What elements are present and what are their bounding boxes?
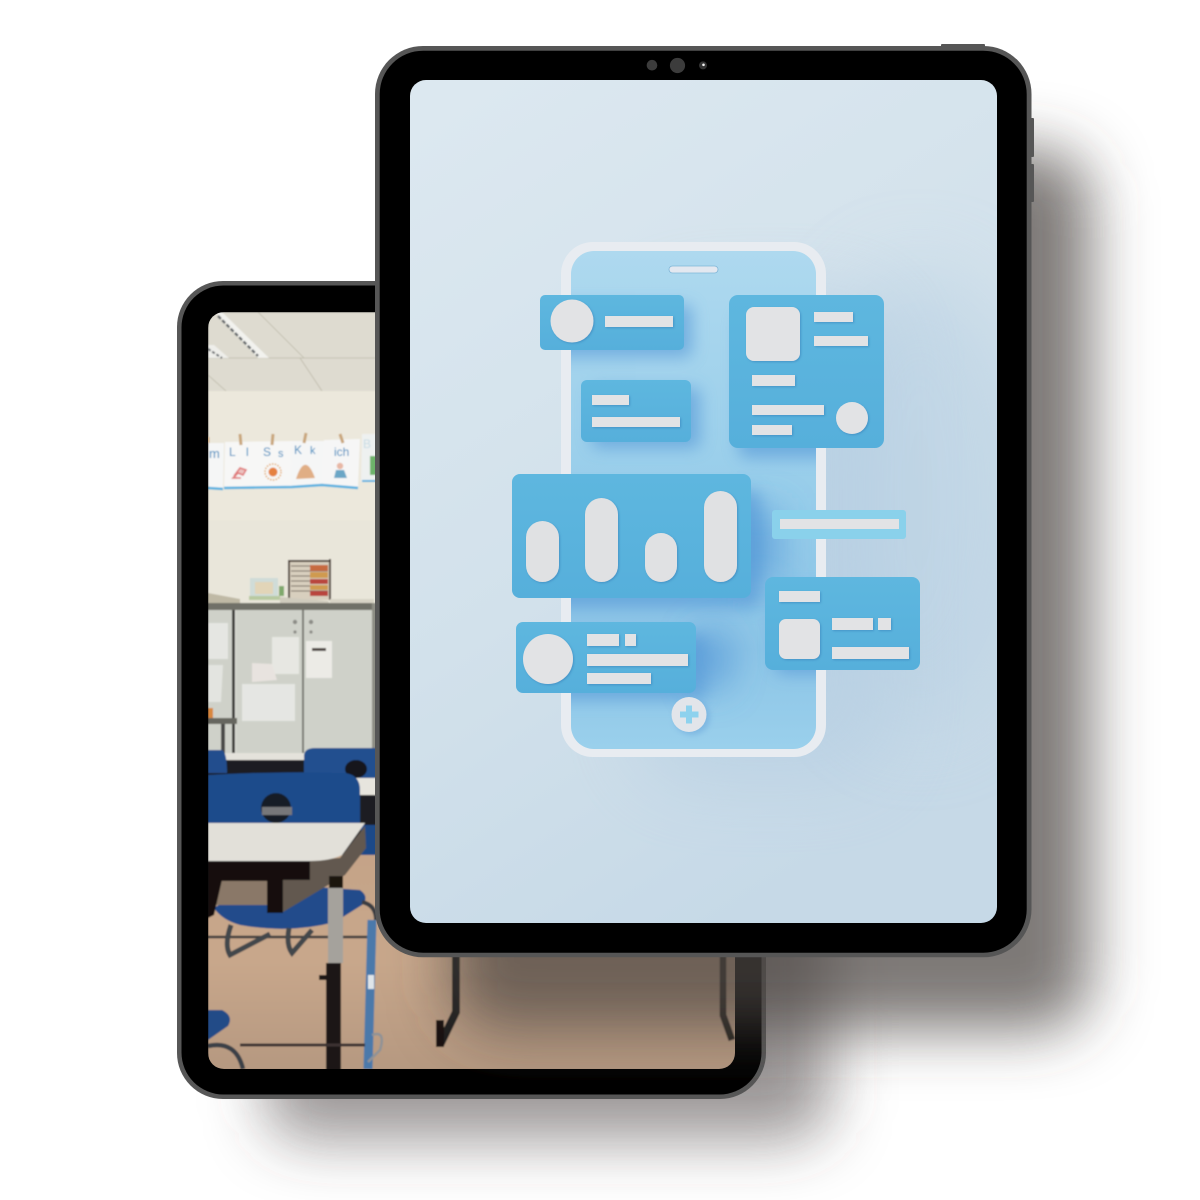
back tablet body	[177, 281, 766, 1099]
ceiling	[208, 312, 378, 392]
ceiling lights	[208, 312, 269, 358]
lower floor details	[208, 950, 732, 1069]
front desk	[208, 823, 366, 1070]
front chair back	[208, 772, 360, 825]
alphabet posters: S	[263, 445, 271, 459]
alphabet posters: k	[310, 445, 316, 457]
card: profile row	[540, 295, 684, 350]
floor	[208, 850, 738, 1070]
card: list item right	[765, 577, 920, 670]
back tablet	[177, 281, 766, 1099]
alphabet posters	[208, 433, 378, 489]
alphabet posters: s	[278, 448, 284, 460]
speaker slot	[669, 266, 718, 273]
phone inner screen	[571, 251, 816, 749]
screen background	[410, 80, 997, 923]
alphabet posters: B	[363, 437, 371, 451]
floating card shadows on phone	[571, 298, 816, 707]
card: light label	[772, 510, 906, 539]
app screen	[410, 80, 1030, 923]
wall	[208, 390, 375, 521]
add button	[672, 697, 710, 735]
chair seat and legs	[208, 882, 382, 1069]
rear tables and chairs	[208, 748, 378, 855]
classroom photo	[208, 312, 738, 1070]
alphabet posters: m	[209, 446, 220, 461]
card: profile detail	[729, 295, 884, 448]
card: bar chart	[512, 474, 751, 598]
alphabet posters: ich	[334, 445, 349, 459]
alphabet posters: l	[246, 445, 249, 459]
alphabet posters: K	[294, 443, 302, 457]
back tablet drop shadow	[265, 350, 830, 1140]
card: list item left	[516, 622, 696, 693]
abacus and shelf objects	[208, 559, 374, 604]
cameras	[647, 58, 707, 73]
front tablet body	[375, 46, 1032, 957]
card: text lines	[581, 380, 691, 442]
side buttons	[941, 44, 1034, 202]
front tablet drop shadow	[450, 150, 1090, 1030]
phone illustration	[512, 242, 921, 757]
phone ambient shadow	[670, 448, 875, 776]
tablet mockup composition	[177, 44, 1138, 1184]
alphabet posters: L	[229, 445, 236, 459]
phone frame	[561, 242, 826, 757]
front tablet	[375, 44, 1034, 957]
cabinets	[208, 603, 378, 758]
